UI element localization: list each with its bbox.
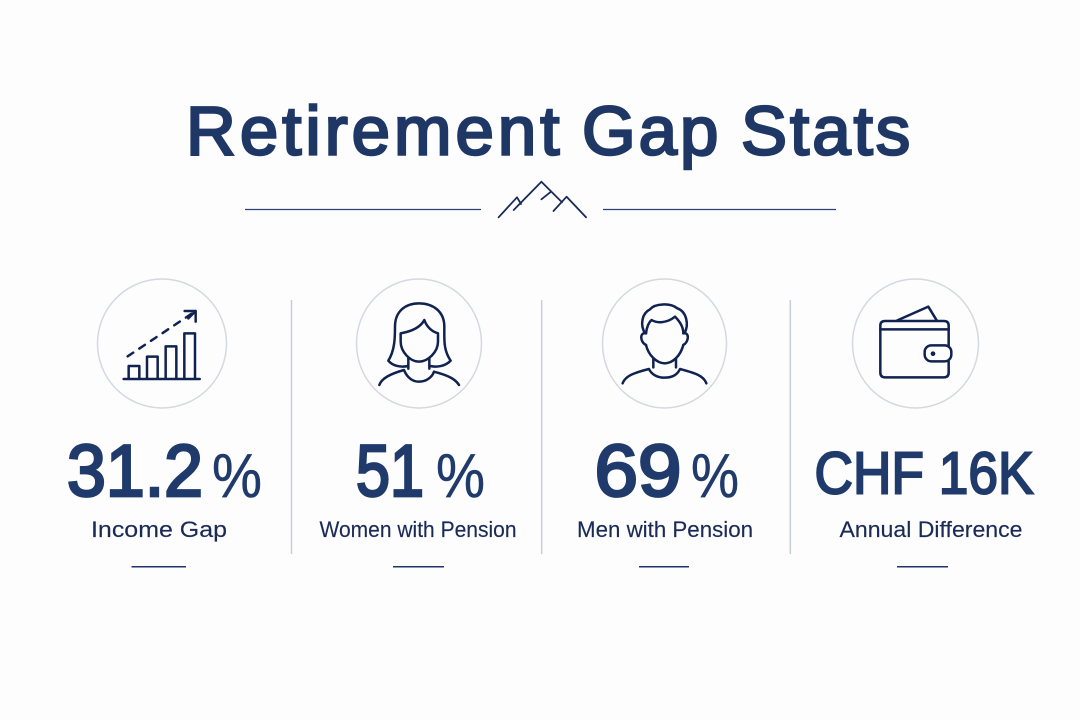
icon: wallet xyxy=(852,279,978,408)
value: 51%: 51 xyxy=(356,431,424,512)
label: annual difference: Annual Difference xyxy=(840,517,1022,542)
value: CHF 16K: CHF 16K xyxy=(814,440,1034,506)
value: 51%: % xyxy=(436,442,485,511)
title: Stats xyxy=(741,92,913,170)
value: 31.2%: % xyxy=(212,442,262,511)
panel: women with pension xyxy=(320,279,516,567)
label: women with pension: Women with Pension xyxy=(320,517,516,542)
value: 51% xyxy=(356,431,485,512)
value: 31.2%: 31.2 xyxy=(67,431,203,512)
label: income gap: Income Gap xyxy=(91,517,227,542)
value: 69%: % xyxy=(691,442,739,511)
panel: men with pension xyxy=(577,279,753,567)
label: men with pension: Men with Pension xyxy=(577,517,753,542)
panel: annual difference xyxy=(814,279,1034,567)
icon: man portrait xyxy=(602,279,726,408)
value: 69%: 69 xyxy=(594,431,682,512)
title: Gap xyxy=(582,92,721,170)
icon: rising bar chart xyxy=(98,279,226,408)
panel: income gap xyxy=(67,279,262,567)
icon: woman portrait xyxy=(356,279,482,408)
title ornament: mountain with rules xyxy=(245,182,836,217)
value: 69% xyxy=(594,431,739,512)
title: Retirement xyxy=(186,92,563,170)
